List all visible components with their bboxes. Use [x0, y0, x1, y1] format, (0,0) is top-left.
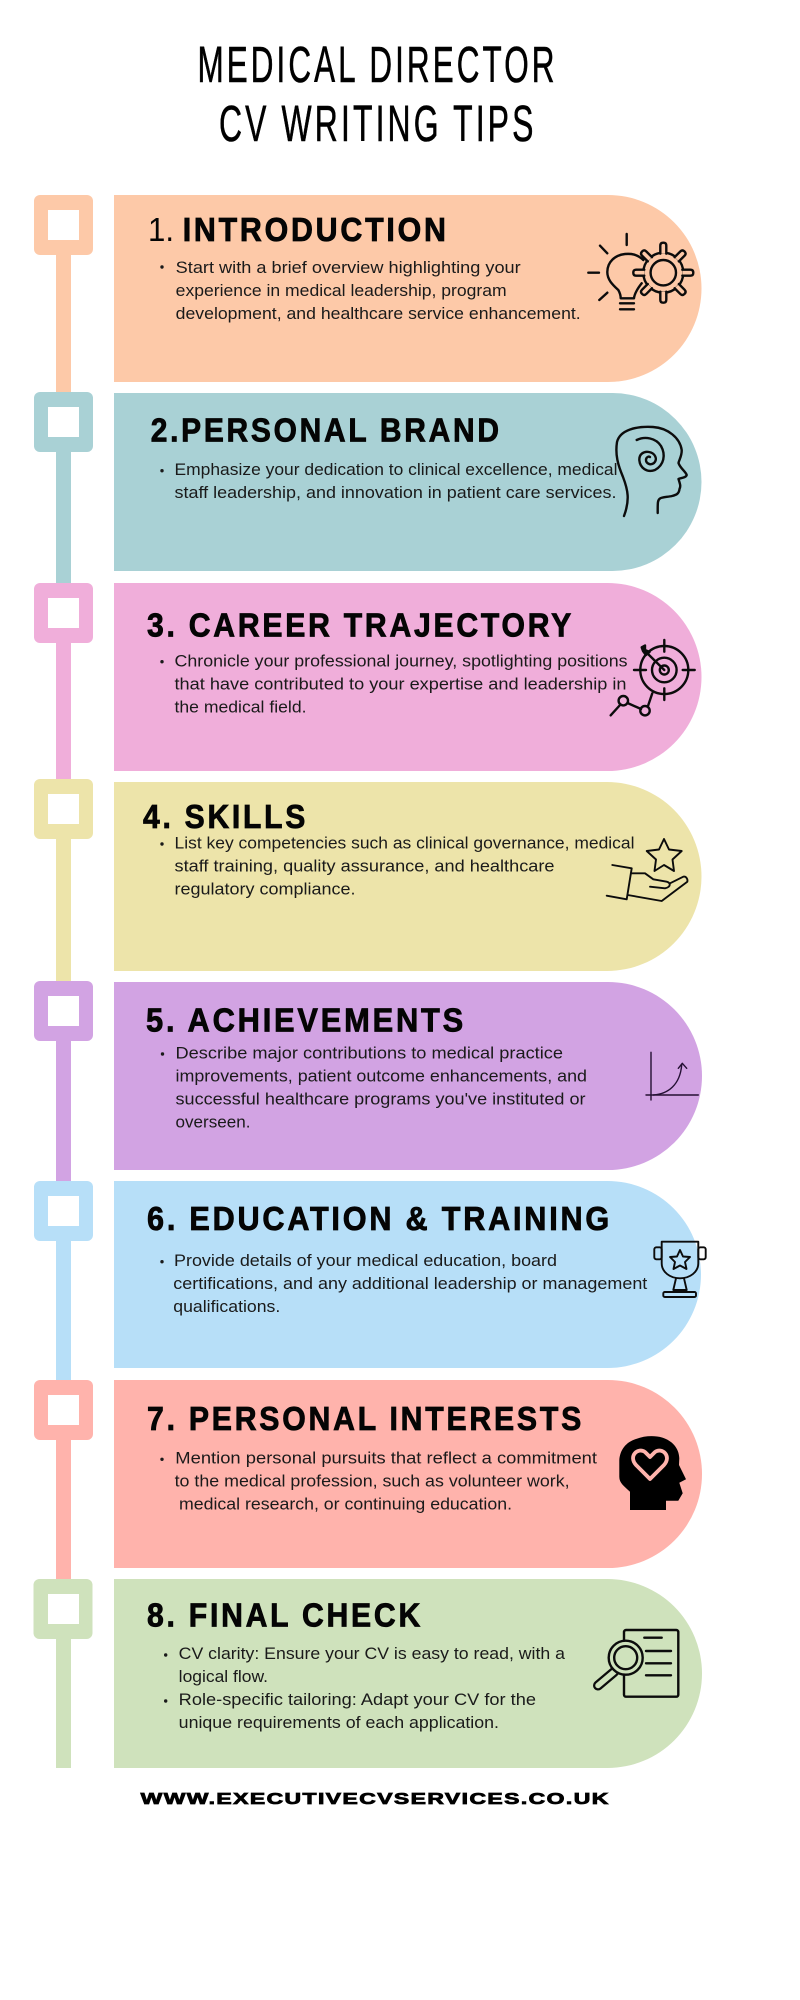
timeline marker 6	[34, 1181, 93, 1382]
icon: head with heart	[619, 1436, 686, 1510]
bullet text	[160, 258, 581, 323]
bullet text: Start with a brief overview highlighting your	[176, 258, 521, 277]
bullet text: logical flow.	[179, 1667, 268, 1686]
heading: 4. SKILLS	[143, 798, 308, 835]
icon: growth chart	[646, 1052, 698, 1100]
timeline marker 5	[34, 981, 93, 1183]
bullet text: development, and healthcare service enhancement.	[176, 304, 581, 323]
heading: 7. PERSONAL INTERESTS	[147, 1400, 584, 1437]
bullet text: Provide details of your medical education, board	[174, 1251, 557, 1270]
heading: 3. CAREER TRAJECTORY	[147, 607, 574, 644]
bullet text	[161, 1043, 587, 1131]
bullet text: unique requirements of each application.	[179, 1713, 499, 1732]
bullet text: overseen.	[176, 1112, 250, 1131]
panel background	[114, 393, 702, 571]
bullet text: List key competencies such as clinical governance, medical	[174, 833, 634, 852]
bullet text	[160, 833, 635, 898]
title: MEDICAL DIRECTOR	[198, 36, 558, 93]
panel: personal brand	[114, 393, 702, 571]
panel background	[114, 583, 702, 771]
heading: INTRODUCTION	[183, 211, 449, 248]
timeline marker 3	[34, 583, 93, 782]
bullet text: experience in medical leadership, program	[176, 281, 507, 300]
panel background	[114, 1380, 702, 1568]
bullet text: improvements, patient outcome enhancements, and	[176, 1066, 587, 1085]
panel background	[114, 1579, 702, 1768]
timeline marker 4	[34, 779, 93, 983]
bullet text: to the medical profession, such as volunteer work,	[175, 1471, 570, 1490]
bullet text	[164, 1644, 566, 1732]
icon: head with spiral	[616, 427, 687, 516]
icon: target and arrow	[611, 640, 695, 715]
panel: skills	[114, 782, 702, 971]
panel: career trajectory	[114, 583, 702, 771]
panel background	[114, 782, 702, 971]
timeline marker 7	[34, 1380, 93, 1581]
bullet text: regulatory compliance.	[174, 879, 356, 898]
bullet text: certifications, and any additional leadership or management	[173, 1274, 648, 1293]
timeline marker 1	[34, 195, 93, 395]
title	[198, 36, 558, 152]
panel: introduction	[114, 195, 702, 382]
title: CV WRITING TIPS	[219, 95, 536, 152]
heading: 6. EDUCATION & TRAINING	[147, 1200, 612, 1237]
panel: personal interests	[114, 1380, 702, 1568]
heading: 5. ACHIEVEMENTS	[146, 1002, 466, 1039]
panel background	[114, 982, 702, 1170]
bullet text: Describe major contributions to medical practice	[176, 1043, 563, 1062]
bullet text: the medical field.	[174, 697, 306, 716]
bullet text: qualifications.	[173, 1297, 280, 1316]
bullet text: CV clarity: Ensure your CV is easy to read, with a	[179, 1644, 566, 1663]
footer website: WWW.EXECUTIVECVSERVICES.CO.UK	[141, 1791, 610, 1808]
timeline marker 8	[34, 1579, 92, 1768]
bullet text: Emphasize your dedication to clinical excellence, medical	[174, 460, 618, 479]
heading: 8. FINAL CHECK	[147, 1597, 423, 1634]
heading: 1.	[148, 211, 174, 248]
heading: 2.PERSONAL BRAND	[151, 412, 502, 449]
timeline marker 2	[34, 392, 93, 585]
bullet text	[160, 460, 618, 502]
icon: light bulb and gear	[588, 234, 693, 309]
bullet text: Chronicle your professional journey, spotlighting positions	[174, 652, 628, 671]
bullet text: Role-specific tailoring: Adapt your CV for the	[179, 1690, 536, 1709]
bullet text: staff training, quality assurance, and healthcare	[174, 856, 554, 875]
bullet text: that have contributed to your expertise and leadership in	[174, 675, 626, 694]
panel background	[114, 195, 702, 382]
bullet text	[160, 652, 628, 716]
icon: hand holding star	[607, 839, 687, 901]
icon: document and magnifier	[598, 1630, 678, 1697]
panel: final check	[114, 1579, 702, 1768]
panel background	[114, 1181, 701, 1368]
timeline	[34, 195, 93, 1768]
bullet text: medical research, or continuing education.	[179, 1494, 512, 1513]
bullet text: staff leadership, and innovation in patient care services.	[174, 483, 616, 502]
panel: achievements	[114, 982, 702, 1170]
bullet text	[160, 1251, 648, 1316]
bullet text: successful healthcare programs you've instituted or	[176, 1089, 586, 1108]
icon: trophy	[654, 1242, 706, 1297]
bullet text	[160, 1448, 597, 1513]
panel: education and training	[114, 1181, 706, 1368]
bullet text: Mention personal pursuits that reflect a commitment	[175, 1448, 597, 1467]
